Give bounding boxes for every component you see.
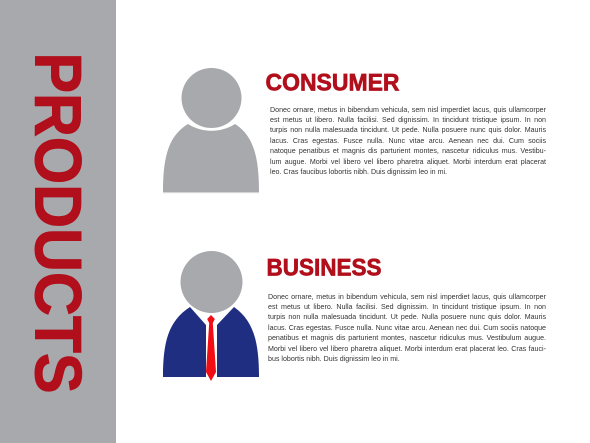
text block: business description <box>268 292 546 363</box>
suit <box>163 307 259 377</box>
text block: business description: bus lobortis nibh. Duis dignissim leo in mi. <box>268 355 400 363</box>
text block: business description: Donec ornare, metus in bibendum vehicula, sem nisl imperdiet lacus, quis ullamcorper <box>268 292 546 300</box>
text block: consumer description <box>270 106 546 176</box>
text block: business description: turpis non nulla malesuada tincidunt. Ut pede. Nulla posuere nunc quis dolor. Mauris <box>268 313 546 321</box>
text block: consumer description: turpis non nulla malesuada tincidunt. Ut pede. Nulla posuere nunc quis dolor. Mauris <box>270 126 546 134</box>
icon: consumer person <box>163 66 259 193</box>
text block: business description: lacus. Cras egestas. Fusce nulla. Nunc vitae arcu. Aenean nec dui. Cum sociis natoque <box>268 324 546 332</box>
heading: CONSUMER: CONSUMER <box>266 70 400 96</box>
head <box>180 251 242 313</box>
title: PRODUCTS vertical: PRODUCTS <box>22 52 96 394</box>
text block: consumer description: lacus. Cras egestas. Fusce nulla. Nunc vitae arcu. Aenean nec dui. Cum sociis <box>270 137 546 145</box>
text block: business description: Morbi vel libero vel libero pharetra aliquet. Morbi interdum erat placerat leo. Cras fauci- <box>268 345 546 353</box>
heading: BUSINESS: BUSINESS <box>266 254 382 282</box>
text block: consumer description: est metus ut libero. Nulla facilisi. Sed dignissim. In tincidunt tristique ipsum. In non <box>270 116 546 124</box>
text block: business description: penatibus et magnis dis parturient montes, nascetur ridiculus mus. Vestibulum augue. <box>268 334 546 342</box>
text block: consumer description: natoque penatibus et magnis dis parturient montes, nascetur ridiculus mus. Vestibu- <box>270 147 546 155</box>
icon: business person <box>163 251 259 381</box>
text block: consumer description: leo. Cras faucibus lobortis nibh. Duis dignissim leo in mi. <box>270 168 447 176</box>
text block: business description: est metus ut libero. Nulla facilisi. Sed dignissim. In tincidunt tristique ipsum. In non <box>268 303 546 311</box>
tie <box>206 315 216 381</box>
text block: consumer description: lum augue. Morbi vel libero vel libero pharetra aliquet. Morbi interdum erat placerat <box>270 158 546 166</box>
panel: grey sidebar <box>0 0 116 443</box>
text block: consumer description: Donec ornare, metus in bibendum vehicula, sem nisl imperdiet lacus, quis ullamcorper <box>270 106 546 114</box>
